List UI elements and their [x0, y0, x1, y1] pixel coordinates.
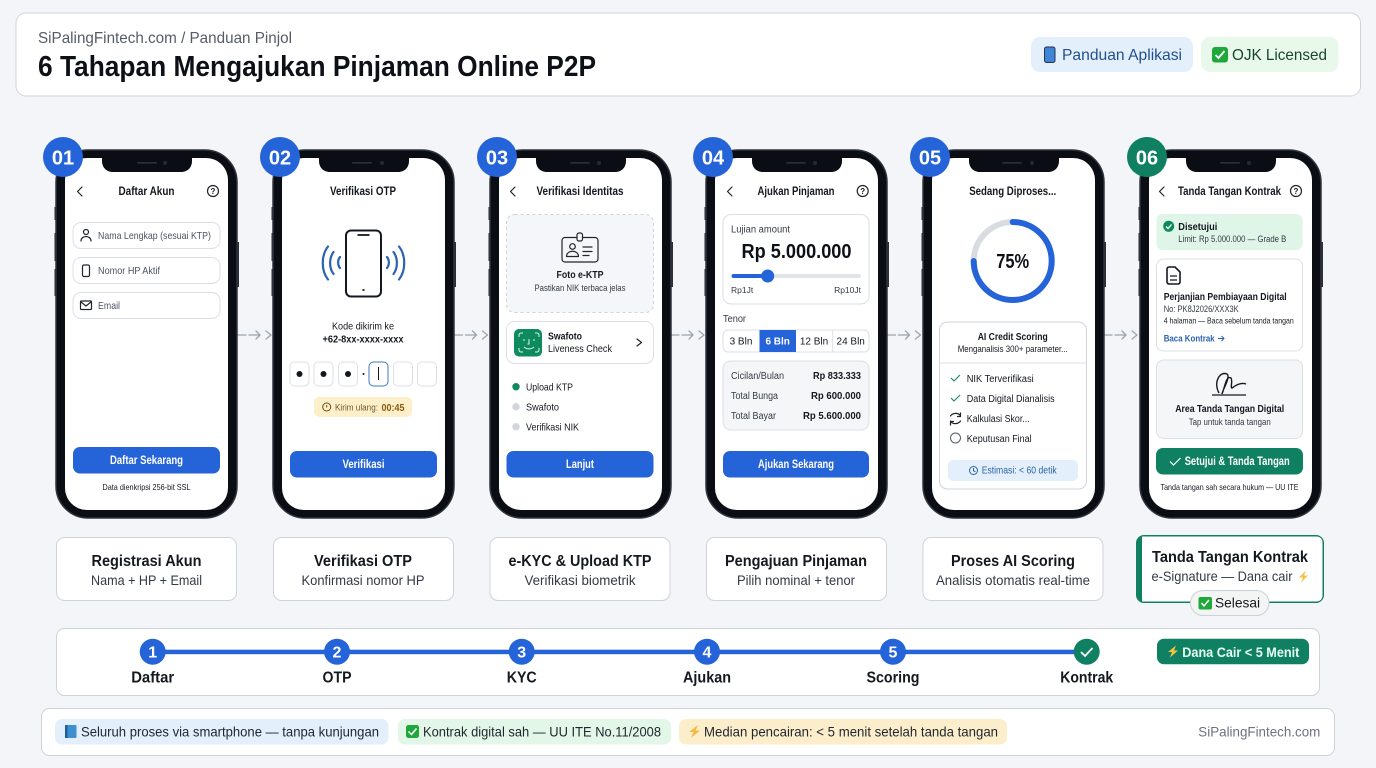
AI credit scoring card: Keputusan Final: [967, 434, 1032, 445]
button: daftar sekarang: [73, 447, 220, 474]
repayment summary: Total Bunga: [731, 391, 778, 402]
resend timer pill: Kirim ulang:: [335, 402, 378, 414]
title: 6 Tahapan Mengajukan Pinjaman Online P2P: [38, 51, 596, 83]
step 2 node: [322, 639, 352, 686]
tenor selector: 3 Bln: [730, 336, 752, 348]
caption: step 4: [706, 538, 886, 600]
caption: step 4: Pengajuan Pinjaman: [725, 553, 867, 570]
phone 6: tanda tangan kontrak: ?: [1294, 187, 1299, 196]
button: ajukan sekarang: Ajukan Sekarang: [758, 459, 834, 471]
selesai pill: Selesai: [1215, 594, 1260, 610]
form fields: Email: [98, 300, 120, 312]
phone 3: verifikasi identitas: Verifikasi Identitas: [536, 184, 624, 198]
panel: header: [16, 13, 1360, 96]
AI credit scoring card: Estimasi: < 60 detik: [982, 466, 1058, 476]
swafoto liveness card: [506, 322, 654, 364]
approval banner: Limit: Rp 5.000.000 — Grade B: [1178, 234, 1286, 244]
step badge 06: [1127, 137, 1167, 177]
panel: progress tracker: [56, 628, 1320, 696]
source: SiPalingFintech.com: [1198, 724, 1320, 740]
upload status list: Upload KTP: [526, 382, 573, 394]
step badge 04: [693, 137, 733, 177]
signature area: Area Tanda Tangan Digital: [1175, 404, 1284, 415]
step 3 node: [507, 639, 537, 686]
selesai pill: [1190, 590, 1269, 616]
phone 1: daftar akun: ?: [211, 187, 216, 196]
phone 4: ajukan pinjaman: Ajukan Pinjaman: [758, 184, 834, 198]
AI credit scoring card: Data Digital Dianalisis: [967, 394, 1055, 405]
swafoto liveness card: Swafoto: [548, 330, 582, 342]
badge: OJK licensed: [1201, 37, 1338, 72]
contract card: 4 halaman — Baca sebelum tanda tangan: [1164, 316, 1294, 326]
dana cair pill: [1157, 639, 1309, 664]
badge: panduan aplikasi: [1031, 37, 1193, 72]
caption: step 2: Verifikasi OTP: [314, 553, 412, 570]
phone 5: sedang diproses: [910, 137, 1106, 518]
phone 6: tanda tangan kontrak: Tanda Tangan Kontrak: [1178, 184, 1281, 198]
breadcrumb: SiPalingFintech.com / Panduan Pinjol: [38, 30, 292, 47]
arrow: step 5 to 6: [1104, 331, 1137, 339]
repayment summary: Rp 5.600.000: [803, 411, 861, 422]
caption: step 6 highlighted: e-Signature — Dana cair: [1152, 568, 1293, 584]
tenor selector: 12 Bln: [800, 336, 828, 348]
form fields: Nomor HP Aktif: [98, 265, 160, 277]
step 6 node: Kontrak: [1060, 670, 1113, 686]
AI credit scoring card: NIK Terverifikasi: [967, 374, 1034, 385]
AI credit scoring card: [940, 322, 1086, 489]
phone 5: sedang diproses: Sedang Diproses...: [969, 184, 1056, 198]
tenor selector: Tenor: [723, 314, 747, 325]
button: ajukan sekarang: [723, 451, 869, 478]
repayment summary: Rp 833.333: [813, 371, 861, 382]
form fields: Nama Lengkap (sesuai KTP): [98, 230, 211, 242]
note: median pencairan: [679, 719, 1007, 744]
note: kontrak digital: Kontrak digital sah — UU ITE No.11/2008: [423, 724, 661, 740]
caption: step 6 highlighted: Tanda Tangan Kontrak: [1152, 549, 1308, 566]
OTP input boxes: [290, 362, 436, 386]
signature area: [1156, 360, 1302, 438]
step 3 node: 3: [517, 644, 526, 662]
step badge 05: [910, 137, 950, 177]
caption: step 4: Pilih nominal + tenor: [737, 572, 855, 588]
repayment summary: [723, 361, 869, 430]
progress ring 75%: 75%: [996, 251, 1029, 273]
icon: vibrating phone: [323, 230, 404, 296]
approval banner: Disetujui: [1178, 221, 1217, 233]
caption: step 3: [490, 538, 670, 600]
repayment summary: Total Bayar: [731, 411, 777, 422]
phone 2: verifikasi OTP: +62-8xx-xxxx-xxxx: [322, 334, 404, 346]
step 6 node: [1060, 639, 1113, 686]
contract card: Baca Kontrak: [1164, 334, 1216, 344]
caption: step 2: [274, 538, 454, 600]
step 5 node: 5: [889, 644, 898, 662]
arrow: step 2 to 3: [454, 331, 488, 339]
caption: step 1: Nama + HP + Email: [91, 572, 202, 588]
loan amount card: Rp1Jt: [731, 285, 754, 295]
arrow: step 1 to 2: [238, 331, 271, 339]
contract card: [1156, 259, 1302, 351]
caption: step 3: e-KYC & Upload KTP: [508, 553, 652, 570]
upload status list: Swafoto: [526, 402, 559, 414]
AI credit scoring card: Menganalisis 300+ parameter...: [958, 344, 1068, 354]
step badge 01: 01: [52, 148, 74, 170]
caption: step 5: Proses AI Scoring: [951, 553, 1075, 570]
resend timer pill: [314, 397, 412, 417]
step badge 02: [260, 137, 300, 177]
phone 6: tanda tangan kontrak: Tanda tangan sah secara hukum — UU ITE: [1160, 482, 1299, 492]
step badge 03: 03: [486, 148, 508, 170]
AI credit scoring card: Kalkulasi Skor...: [967, 414, 1030, 425]
resend timer pill: 00:45: [382, 402, 405, 414]
phone 1: daftar akun: Data dienkripsi 256-bit SSL: [102, 482, 191, 492]
caption: step 6 highlighted: [1136, 535, 1324, 616]
arrow: step 4 to 5: [888, 331, 920, 339]
step badge 05: 05: [919, 148, 941, 170]
step 5 node: Scoring: [866, 670, 920, 686]
caption: step 1: Registrasi Akun: [92, 553, 202, 570]
step 2 node: OTP: [322, 670, 352, 686]
phone 4: ajukan pinjaman: ?: [860, 187, 865, 196]
step 1 node: 1: [148, 644, 157, 662]
progress ring 75%: [974, 222, 1052, 300]
step badge 02: 02: [269, 148, 291, 170]
contract card: No: PK8J2026/XXX3K: [1164, 304, 1239, 314]
loan amount card: Rp10Jt: [834, 285, 862, 295]
button: verifikasi: Verifikasi: [342, 459, 384, 471]
step 4 node: [683, 639, 731, 686]
step 4 node: 4: [703, 644, 712, 662]
tenor selector: 6 Bln: [765, 336, 790, 348]
step 5 node: [866, 639, 920, 686]
step badge 04: 04: [702, 148, 725, 170]
e-KTP upload zone: Foto e-KTP: [556, 269, 604, 281]
signature area: Tap untuk tanda tangan: [1189, 417, 1271, 427]
form fields: [73, 222, 220, 318]
note: smartphone: [55, 719, 388, 744]
button: daftar sekarang: Daftar Sekarang: [110, 455, 183, 467]
upload status list: Verifikasi NIK: [526, 422, 579, 434]
panel: footer notes: [42, 708, 1334, 756]
button: setujui dan tanda tangan: [1156, 448, 1303, 474]
button: setujui dan tanda tangan: Setujui & Tanda Tangan: [1185, 456, 1290, 468]
note: kontrak digital: [398, 719, 671, 744]
step 1 node: Daftar: [131, 670, 174, 686]
caption: step 3: Verifikasi biometrik: [524, 572, 636, 588]
button: lanjut: Lanjut: [566, 459, 594, 471]
phone 2: verifikasi OTP: [260, 137, 456, 518]
phone 6: tanda tangan kontrak: [1127, 137, 1323, 518]
loan amount card: [723, 214, 869, 304]
e-KTP upload zone: [506, 214, 654, 312]
step 4 node: Ajukan: [683, 670, 731, 686]
caption: step 1: [56, 538, 236, 600]
step 2 node: 2: [333, 644, 342, 662]
caption: step 2: Konfirmasi nomor HP: [302, 572, 424, 588]
loan amount card: Rp 5.000.000: [742, 241, 852, 263]
contract card: Perjanjian Pembiayaan Digital: [1164, 291, 1287, 303]
step badge 01: [43, 137, 83, 177]
step 1 node: [131, 639, 174, 686]
button: lanjut: [506, 451, 654, 478]
badge: OJK licensed: OJK Licensed: [1232, 47, 1327, 64]
AI credit scoring card: AI Credit Scoring: [978, 331, 1048, 343]
e-KTP upload zone: Pastikan NIK terbaca jelas: [534, 283, 626, 293]
note: median pencairan: Median pencairan: < 5 menit setelah tanda tangan: [704, 724, 998, 740]
tenor selector: 24 Bln: [837, 336, 865, 348]
caption: step 5: Analisis otomatis real-time: [936, 572, 1090, 588]
step badge 06: 06: [1136, 148, 1158, 170]
repayment summary: Cicilan/Bulan: [731, 371, 784, 382]
arrow: step 3 to 4: [671, 331, 704, 339]
phone 2: verifikasi OTP: Kode dikirim ke: [332, 320, 394, 332]
loan amount card: Lujian amount: [731, 224, 790, 236]
tenor selector: [723, 314, 869, 352]
dana cair pill: Dana Cair < 5 Menit: [1182, 644, 1300, 660]
step 3 node: KYC: [507, 670, 537, 686]
button: verifikasi: [290, 451, 437, 478]
repayment summary: Rp 600.000: [811, 391, 861, 402]
phone 1: daftar akun: Daftar Akun: [118, 184, 174, 198]
step badge 03: [477, 137, 517, 177]
approval banner: [1156, 214, 1302, 250]
phone 3: verifikasi identitas: [477, 137, 673, 518]
swafoto liveness card: Liveness Check: [548, 343, 613, 355]
badge: panduan aplikasi: Panduan Aplikasi: [1062, 47, 1182, 64]
caption: step 5: [923, 538, 1103, 600]
upload status list: [512, 382, 579, 434]
phone 1: daftar akun: [43, 137, 239, 518]
phone 2: verifikasi OTP: Verifikasi OTP: [330, 184, 396, 198]
note: smartphone: Seluruh proses via smartphone — tanpa kunjungan: [81, 724, 379, 740]
phone 4: ajukan pinjaman: [693, 137, 889, 518]
